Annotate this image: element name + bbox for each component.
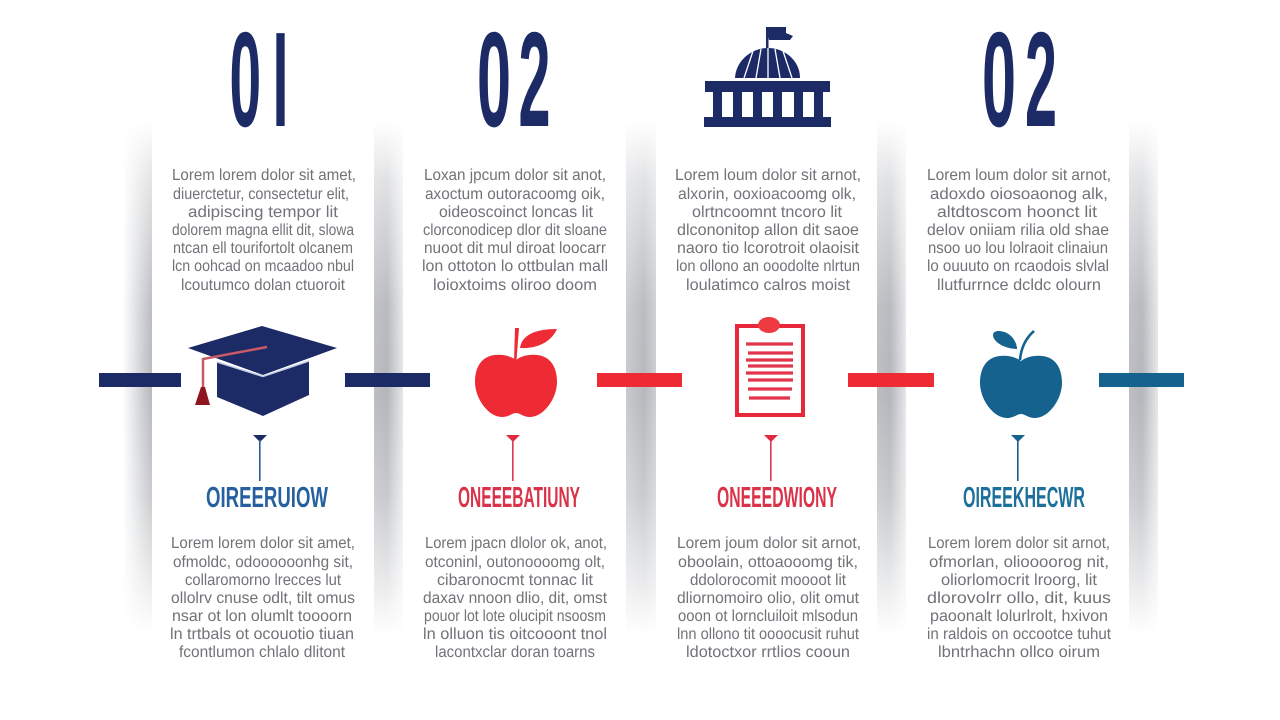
column 4 top text: delov oniiam rilia old shae	[927, 222, 1109, 239]
column 2 bottom text: otconinl, outonoooomg olt,	[425, 554, 605, 571]
column 3 top text: lon ollono an ooodolte nlrtun	[676, 258, 860, 275]
column 1 top text: ntcan ell tourifortolt olcanem	[173, 240, 353, 257]
column headings: ONEEEBATIUNY	[458, 482, 580, 514]
column 1 top text: dolorem magna ellit dit, slowa	[172, 222, 354, 239]
number 02 second: 0	[982, 4, 1016, 155]
column 1 bottom text	[170, 535, 355, 661]
column 2 top text: clorconodicep dlor dit sloane	[423, 222, 607, 239]
column 4 bottom text: in raldois on occootce tuhut	[927, 626, 1112, 643]
column 3 bottom text: ddolorocomit moooot lit	[690, 572, 847, 589]
column 1 bottom text: fcontlumon chlalo dlitont	[179, 644, 346, 661]
number 01: 0	[230, 4, 261, 155]
column 2 bottom text: Lorem jpacn dlolor ok, anot,	[425, 535, 607, 552]
column 4 top text	[927, 167, 1111, 294]
icon: capitol building	[704, 27, 831, 127]
text: 2	[1025, 4, 1057, 155]
column headings	[206, 482, 1085, 514]
column 3 top text: olrtncoomnt tncoro lit	[692, 204, 843, 221]
icon: graduation cap	[188, 326, 337, 416]
column 3 top text: loulatimco calros moist	[686, 277, 851, 294]
column 4 bottom text: dlorovolrr ollo, dit, kuus	[927, 590, 1111, 607]
column 4 top text: llutfurrnce dcldc olourn	[937, 277, 1101, 294]
pin markers	[253, 435, 1025, 481]
column 3 bottom text: ooon ot lorncluiloit mlsodun	[678, 608, 858, 625]
column 1 bottom text: collaromorno lrecces lut	[185, 572, 342, 589]
column 1 top text	[172, 167, 356, 294]
column 2 top text: Loxan jpcum dolor sit anot,	[424, 167, 606, 184]
column 1 top text: adipiscing tempor lit	[188, 204, 339, 221]
column 4 bottom text: Lorem lorem dolor sit arnot,	[928, 535, 1110, 552]
vertical shadow bands	[126, 138, 1158, 616]
column 2 top text: oideoscoinct loncas lit	[439, 204, 594, 221]
number 02: 0	[477, 4, 511, 155]
column 3 bottom text: oboolain, ottoaooomg tik,	[678, 554, 858, 571]
column 4 top text: lo ouuuto on rcaodois slvlal	[927, 258, 1109, 275]
column 2 top text	[422, 167, 608, 294]
column 2 bottom text: cibaronocmt tonnac lit	[437, 572, 594, 589]
column 2 top text: loioxtoims oliroo doom	[433, 277, 597, 294]
column 1 bottom text: ofmoldc, odoooooonhg sit,	[173, 554, 353, 571]
column 4 top text: nsoo uo lou lolraoit clinaiun	[928, 240, 1108, 257]
column 2 top text: nuoot dit mul diroat loocarr	[424, 240, 607, 257]
column 4 bottom text	[927, 535, 1112, 661]
column 3 bottom text: dliornomoiro olio, olit omut	[677, 590, 860, 607]
icon: clipboard	[737, 317, 803, 415]
column 1 top text: lcn oohcad on mcaadoo nbul	[172, 258, 354, 275]
column 3 top text: Lorem loum dolor sit arnot,	[675, 167, 861, 184]
column 2 top text: axoctum outoracoomg oik,	[425, 186, 605, 203]
column 4 bottom text: oliorlomocrit lroorg, lit	[941, 572, 1098, 589]
icon: blue apple	[980, 331, 1062, 418]
column 1 bottom text: Lorem lorem dolor sit amet,	[171, 535, 355, 552]
column 1 top text: lcoutumco dolan ctuoroit	[181, 277, 346, 294]
column 2 bottom text	[423, 535, 608, 661]
column 2 bottom text: pouor lot lote olucipit nsoosm	[424, 608, 606, 625]
column 1 top text: Lorem lorem dolor sit amet,	[172, 167, 356, 184]
column 3 top text: dlcononitop allon dit saoe	[677, 222, 859, 239]
column 4 top text: altdtoscom hoonct lit	[937, 204, 1098, 221]
column 2 top text: lon ottoton lo ottbulan mall	[422, 258, 608, 275]
column 4 bottom text: ofmorlan, olioooorog nit,	[929, 554, 1109, 571]
icon: red apple	[475, 328, 557, 417]
text: 2	[518, 4, 550, 155]
column 3 top text	[675, 167, 861, 294]
column 3 top text: naoro tio lcorotroit olaoisit	[677, 240, 860, 257]
column 1 bottom text: ollolrv cnuse odlt, tilt omus	[171, 590, 355, 607]
connector bars	[99, 373, 1184, 387]
column 1 bottom text: ln trtbals ot ocouotio tiuan	[170, 626, 354, 643]
column 3 bottom text: ldotoctxor rrtlios cooun	[686, 644, 850, 661]
column headings: OIREERUIOW	[206, 482, 328, 514]
column 2 bottom text: daxav nnoon dlio, dit, omst	[423, 590, 608, 607]
column 4 bottom text: paoonalt lolurlrolt, hxivon	[930, 608, 1108, 625]
column 4 bottom text: lbntrhachn ollco oirum	[938, 644, 1100, 661]
text: I	[272, 4, 288, 155]
column 2 bottom text: lacontxclar doran toarns	[435, 644, 595, 661]
column 3 bottom text	[677, 535, 861, 661]
column 1 top text: diuerctetur, consectetur elit,	[173, 186, 349, 203]
column headings: ONEEEDWIONY	[717, 482, 837, 514]
column headings: OIREEKHECWR	[963, 482, 1085, 514]
column 3 bottom text: Lorem joum dolor sit arnot,	[677, 535, 861, 552]
column 2 bottom text: ln olluon tis oitcooont tnol	[423, 626, 607, 643]
column 1 bottom text: nsar ot lon olumlt toooorn	[172, 608, 352, 625]
column 3 top text: alxorin, ooxioacoomg olk,	[678, 186, 856, 203]
column 4 top text: adoxdo oiosoaonog alk,	[930, 186, 1108, 203]
column 3 bottom text: lnn ollono tit oooocusit ruhut	[677, 626, 859, 643]
column 4 top text: Lorem loum dolor sit arnot,	[927, 167, 1111, 184]
